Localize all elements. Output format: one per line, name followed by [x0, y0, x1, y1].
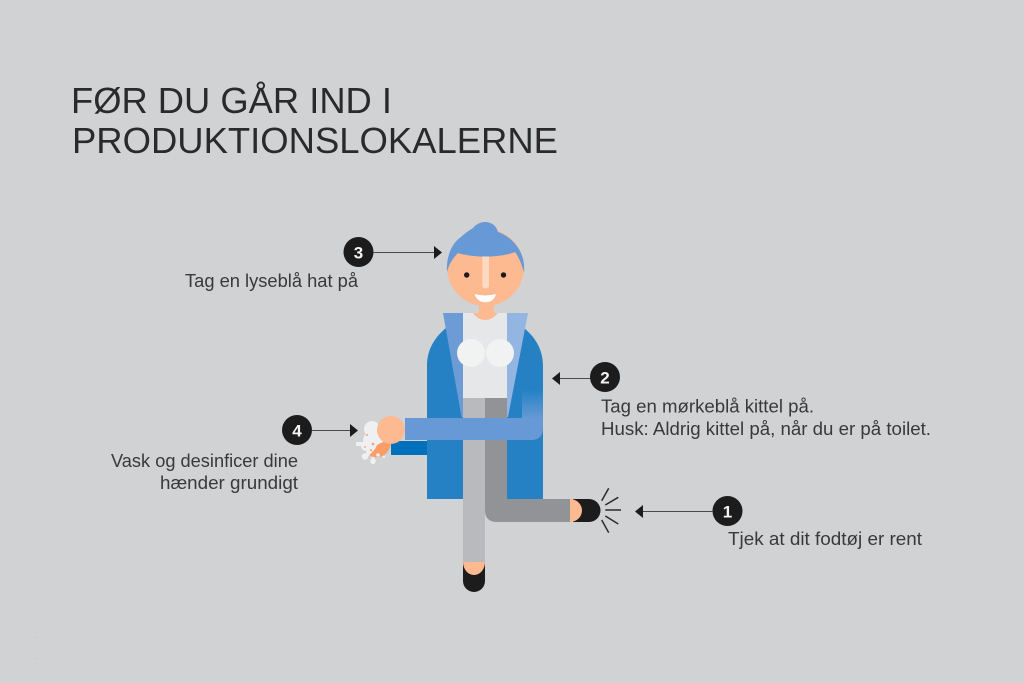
callout 2: coat: 2: [600, 368, 610, 388]
hair: [447, 222, 524, 272]
chest: [457, 339, 514, 367]
callout 2: coat: Tag en mørkeblå kittel på.: [601, 396, 814, 416]
callout 1: footwear: 1: [723, 502, 732, 522]
callout 1: footwear: Tjek at dit fodtøj er rent: [728, 529, 922, 549]
callout 4: hands: 4: [292, 422, 302, 440]
title: FØR DU GÅR IND I: [71, 80, 392, 121]
callout 3: hat: [185, 237, 442, 291]
callout 4: hands: Vask og desinficer dine: [111, 451, 298, 471]
callout 3: hat: Tag en lyseblå hat på: [185, 271, 359, 291]
callout 3: hat: 3: [354, 244, 363, 262]
figure: person: [356, 222, 621, 592]
leg: raised: [485, 398, 600, 522]
leg: standing: [463, 398, 485, 592]
coat back sleeve: [391, 441, 431, 455]
coat body: [427, 320, 543, 499]
callout 2: coat: Husk: Aldrig kittel på, når du er på toilet.: [601, 419, 931, 439]
callout 4: hands: hænder grundigt: [160, 473, 298, 493]
icon: shine rays at shoe: [602, 488, 621, 533]
callout 4: hands: [111, 415, 358, 493]
hand with foam: [356, 416, 405, 464]
smile: [474, 294, 496, 302]
shirt: [463, 313, 507, 398]
title: [71, 80, 558, 161]
nose: [482, 256, 489, 288]
head: [447, 222, 524, 306]
title: PRODUKTIONSLOKALERNE: [72, 120, 558, 161]
neck: [473, 300, 498, 320]
arm: front sleeve: [405, 390, 543, 440]
lapels: [443, 313, 528, 417]
eyes: [464, 272, 469, 278]
callout 1: footwear: [635, 496, 922, 549]
callout 2: coat: [552, 362, 931, 439]
